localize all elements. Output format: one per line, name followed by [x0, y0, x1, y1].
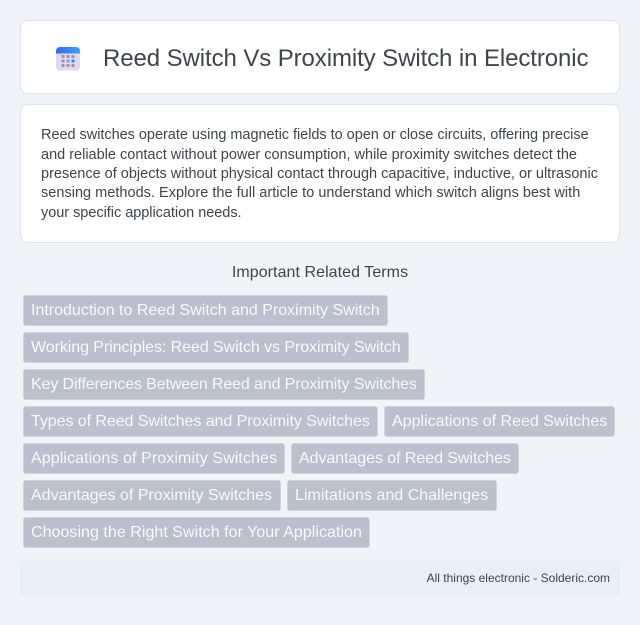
related terms tags: Applications of Proximity Switches — [31, 450, 277, 467]
header panel — [20, 20, 620, 94]
related terms tags: Types of Reed Switches and Proximity Switches — [31, 413, 370, 430]
title: Reed Switch Vs Proximity Switch in Electronic — [103, 45, 588, 72]
intro text: Reed switches operate using magnetic fields to open or close circuits, offering precise — [41, 127, 589, 143]
related terms tags: Advantages of Reed Switches — [299, 450, 511, 467]
icon: calendar — [56, 47, 80, 70]
related terms tags: Choosing the Right Switch for Your Application — [31, 524, 362, 541]
related terms tags: Limitations and Challenges — [295, 487, 488, 504]
related terms tags: Introduction to Reed Switch and Proximity Switch — [31, 302, 380, 319]
intro text: and reliable contact without power consumption, while proximity switches detect the — [41, 147, 577, 163]
footer: All things electronic - Solderic.com — [427, 571, 610, 585]
footer — [20, 561, 620, 595]
related terms tags — [23, 295, 615, 548]
intro text: presence of objects without physical contact through capacitive, inductive, or ultrasonic — [41, 166, 598, 182]
intro text: your specific application needs. — [41, 205, 242, 221]
intro panel — [20, 104, 620, 243]
intro text: sensing methods. Explore the full article to understand which switch aligns best with — [41, 185, 580, 201]
related terms tags: Key Differences Between Reed and Proximity Switches — [31, 376, 417, 393]
intro text — [41, 127, 598, 221]
related terms tags: Working Principles: Reed Switch vs Proximity Switch — [31, 339, 401, 356]
section heading: Important Related Terms — [232, 264, 408, 281]
related terms tags: Applications of Reed Switches — [392, 413, 607, 430]
related terms tags: Advantages of Proximity Switches — [31, 487, 272, 504]
